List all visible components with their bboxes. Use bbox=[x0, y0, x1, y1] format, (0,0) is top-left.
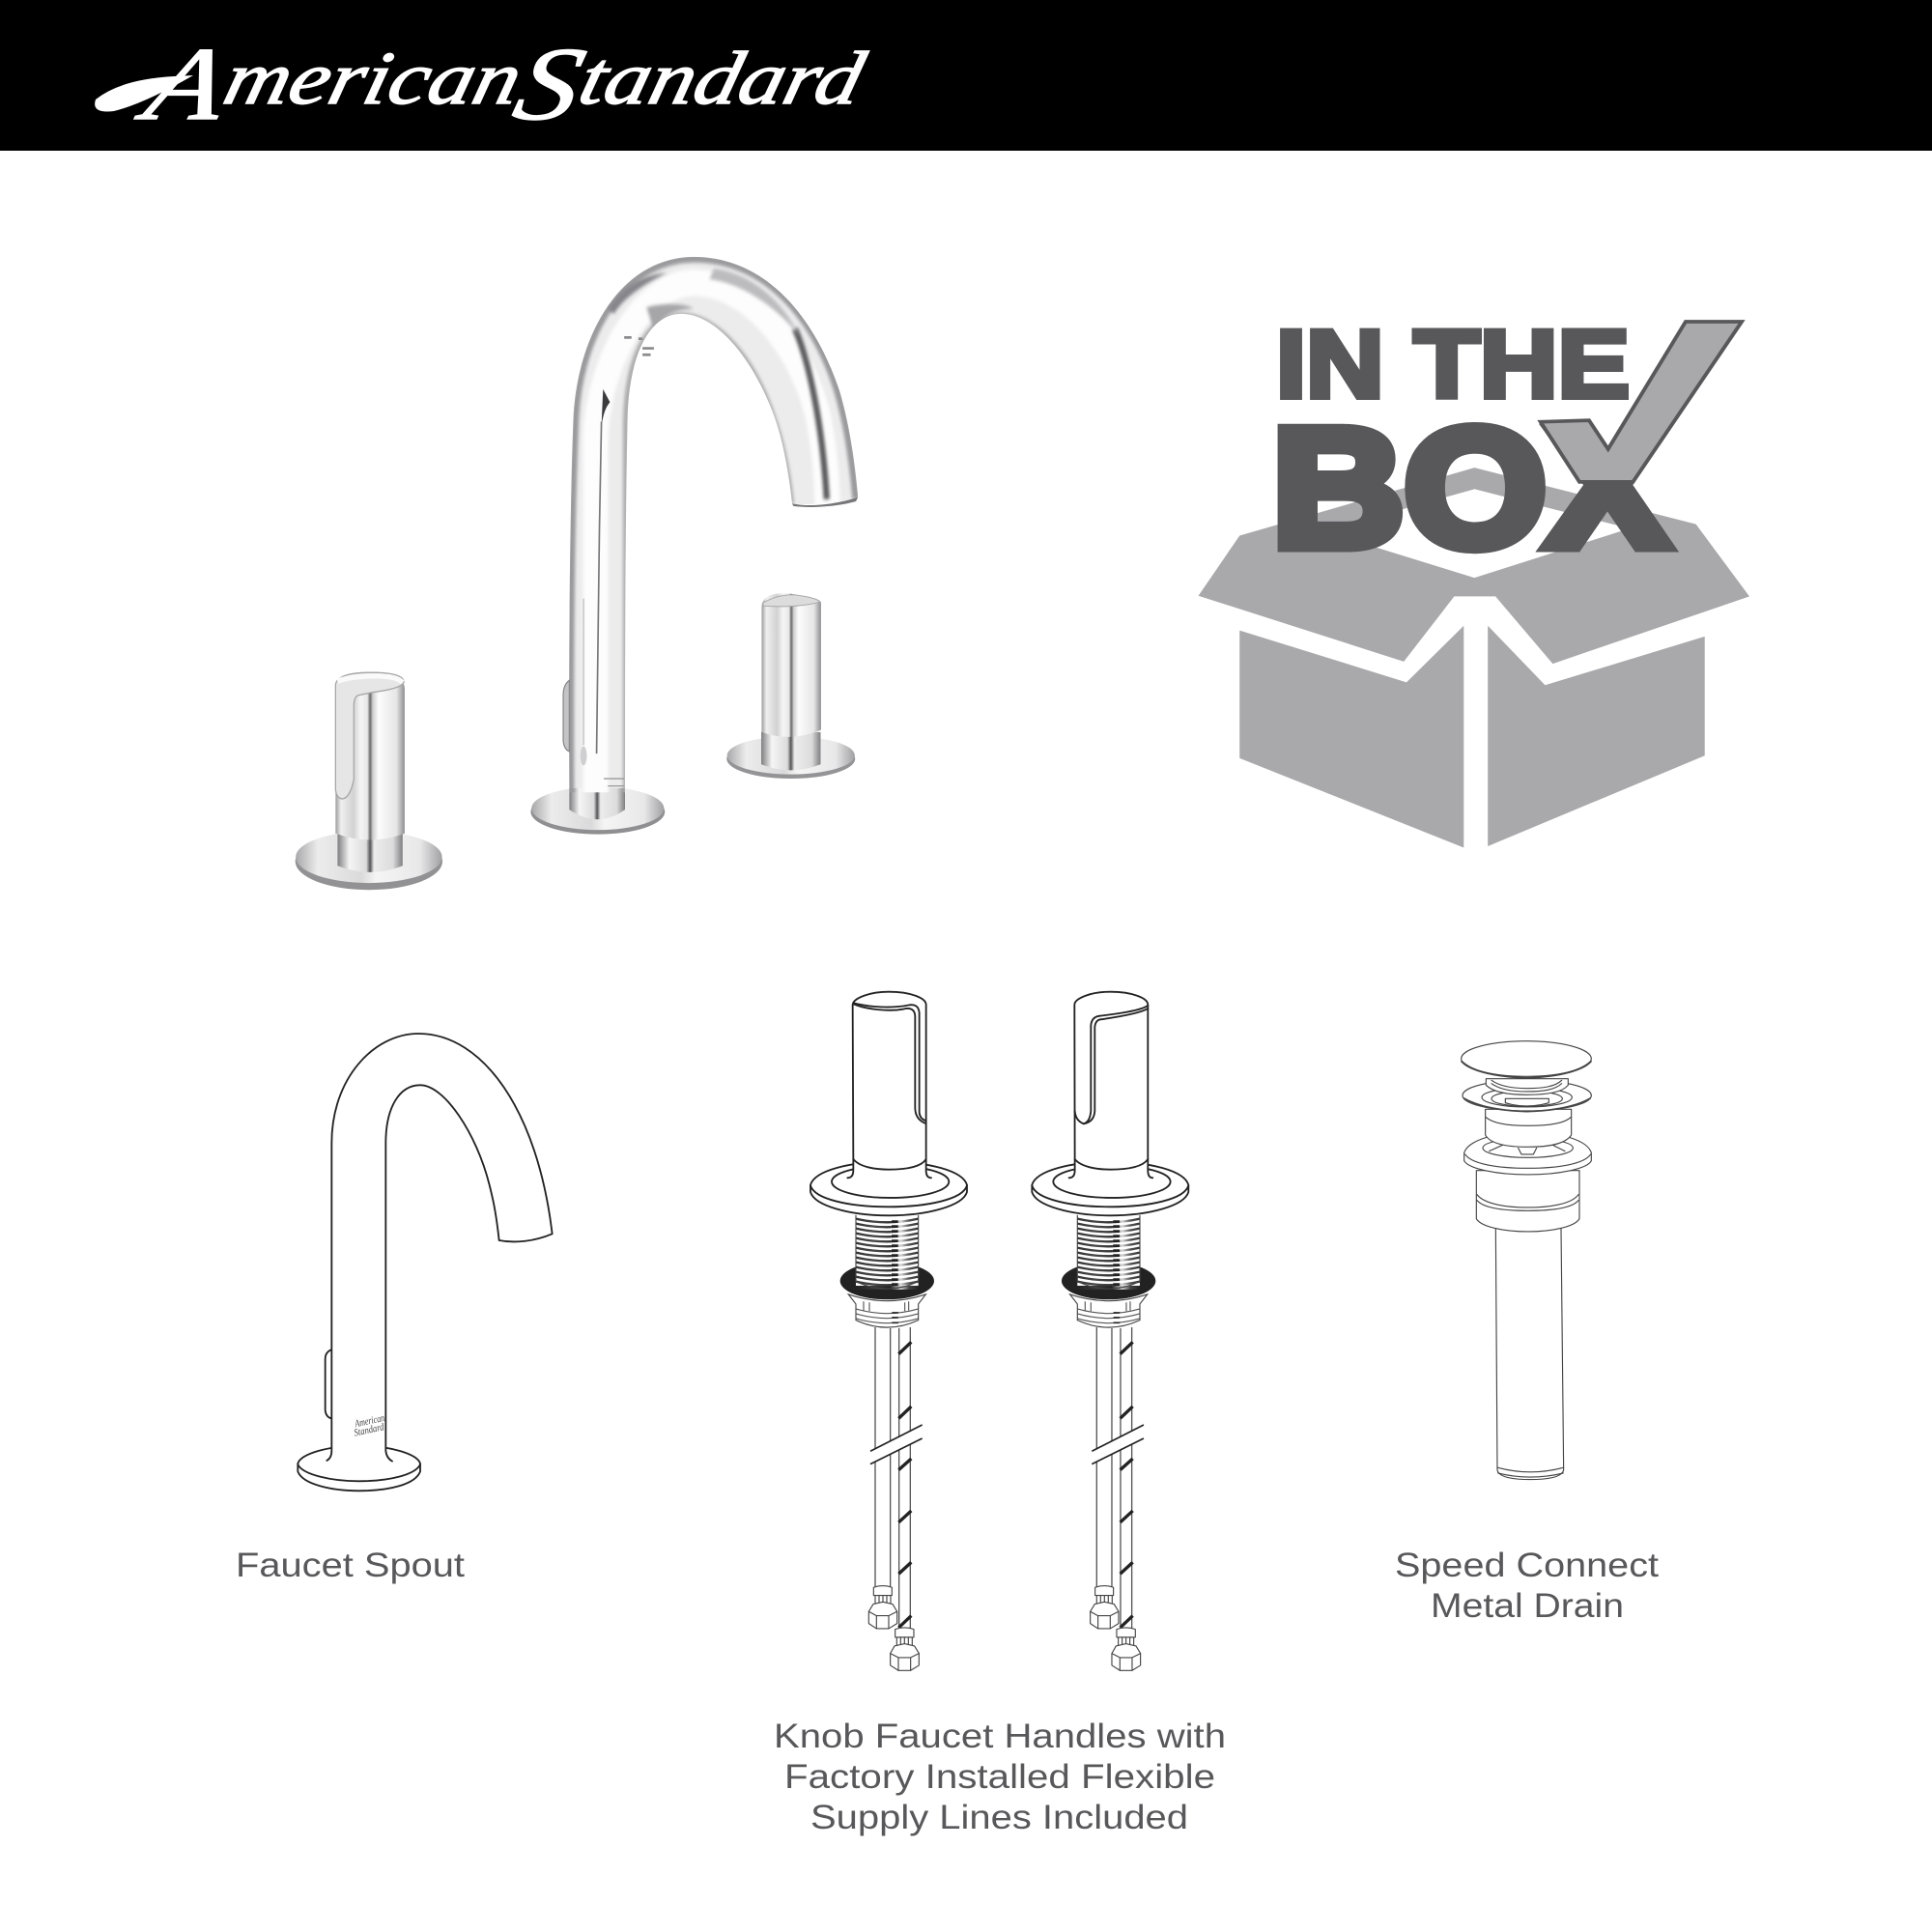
label: speed connect metal drain: Metal Drain bbox=[1431, 1587, 1624, 1625]
drain neck bbox=[1486, 1109, 1572, 1147]
header bar bbox=[0, 0, 1932, 151]
box flaps bbox=[1199, 468, 1749, 664]
flange bbox=[810, 1162, 967, 1215]
small logo mark: American bbox=[354, 1413, 385, 1430]
right knob handle assembly bbox=[1032, 992, 1188, 1670]
sensor tab bbox=[326, 1350, 331, 1418]
right handle bbox=[726, 593, 855, 779]
left handle bbox=[296, 672, 442, 890]
drain collar bbox=[1476, 1171, 1579, 1232]
label: faucet spout: Faucet Spout bbox=[236, 1547, 465, 1584]
label: speed connect metal drain: Speed Connect bbox=[1395, 1547, 1659, 1584]
label: knob faucet handles bbox=[774, 1718, 1226, 1836]
heading: in the box bbox=[1272, 310, 1753, 582]
in the box graphic bbox=[1199, 468, 1749, 847]
line drawing: metal drain bbox=[1462, 1041, 1591, 1480]
logo bbox=[95, 25, 876, 142]
stopper cap bbox=[1462, 1041, 1591, 1076]
spout base bbox=[298, 1446, 420, 1491]
spout body bbox=[563, 257, 858, 819]
stopper stem bbox=[1486, 1079, 1568, 1094]
spout outline bbox=[327, 1034, 553, 1462]
logo: tandard bbox=[572, 37, 873, 121]
label: speed connect metal drain bbox=[1395, 1547, 1659, 1625]
drain ledge bbox=[1464, 1132, 1591, 1175]
left knob handle assembly bbox=[810, 992, 967, 1670]
line drawing: faucet spout: Standard bbox=[354, 1422, 385, 1439]
knob body bbox=[853, 992, 926, 1177]
label: knob faucet handles: Knob Faucet Handles with bbox=[774, 1718, 1226, 1755]
box right panel bbox=[1488, 626, 1705, 846]
sensor tab bbox=[563, 680, 569, 752]
heading: in the box: BOX bbox=[1272, 393, 1668, 582]
logo: merican bbox=[216, 37, 530, 121]
spout tip bbox=[792, 497, 858, 507]
small marks bbox=[624, 337, 654, 355]
label: knob faucet handles: Factory Installed Flexible bbox=[784, 1758, 1215, 1796]
label: knob faucet handles: Supply Lines Included bbox=[810, 1799, 1188, 1836]
heading: in the box: IN THE bbox=[1276, 310, 1630, 417]
check mark bbox=[1541, 322, 1742, 482]
logo: A bbox=[128, 25, 242, 142]
strainer flange bbox=[1463, 1080, 1591, 1111]
spout base disc bbox=[530, 787, 665, 835]
line drawing: faucet spout bbox=[298, 1034, 553, 1491]
box left panel bbox=[1239, 626, 1463, 847]
product photo: chrome faucet set bbox=[296, 257, 858, 890]
drain pipe bbox=[1495, 1227, 1564, 1480]
line drawing: knob handles with supply lines bbox=[810, 992, 1188, 1670]
logo: S bbox=[504, 25, 595, 142]
